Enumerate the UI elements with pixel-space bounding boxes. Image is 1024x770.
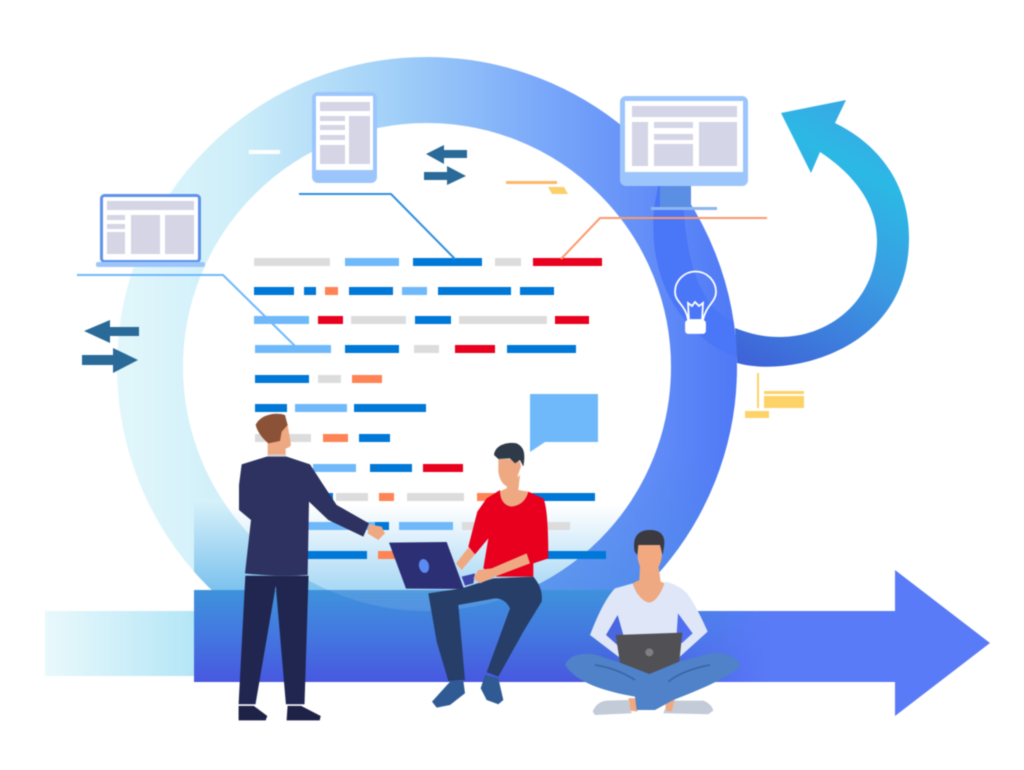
tablet icon	[312, 92, 377, 183]
left tail of main arrow	[45, 611, 195, 676]
frosted panel over ring	[194, 510, 328, 590]
laptop icon	[96, 196, 205, 267]
circular ring	[150, 90, 704, 644]
person: seated man in red	[389, 443, 548, 708]
exchange arrows left	[82, 320, 139, 373]
speech bubble	[530, 394, 598, 452]
task bars	[254, 258, 606, 559]
curved return arrow	[735, 100, 909, 367]
yellow task marks bottom	[745, 373, 804, 418]
ring shadow overlap	[653, 186, 736, 349]
connector lines	[77, 194, 767, 346]
light bulb icon	[675, 272, 716, 333]
ring lower right tint	[538, 505, 683, 590]
yellow task marks top	[506, 181, 568, 194]
agile cycle illustration	[45, 56, 990, 722]
monitor icon	[620, 96, 748, 210]
small ring dash	[249, 150, 280, 154]
person: cross-legged man	[565, 530, 740, 715]
main arrow	[600, 570, 990, 716]
frosted panel inside circle	[233, 512, 621, 590]
exchange arrows top	[424, 145, 467, 185]
base circle highlight	[330, 590, 500, 611]
person: standing man	[239, 414, 385, 720]
base block	[194, 590, 770, 682]
